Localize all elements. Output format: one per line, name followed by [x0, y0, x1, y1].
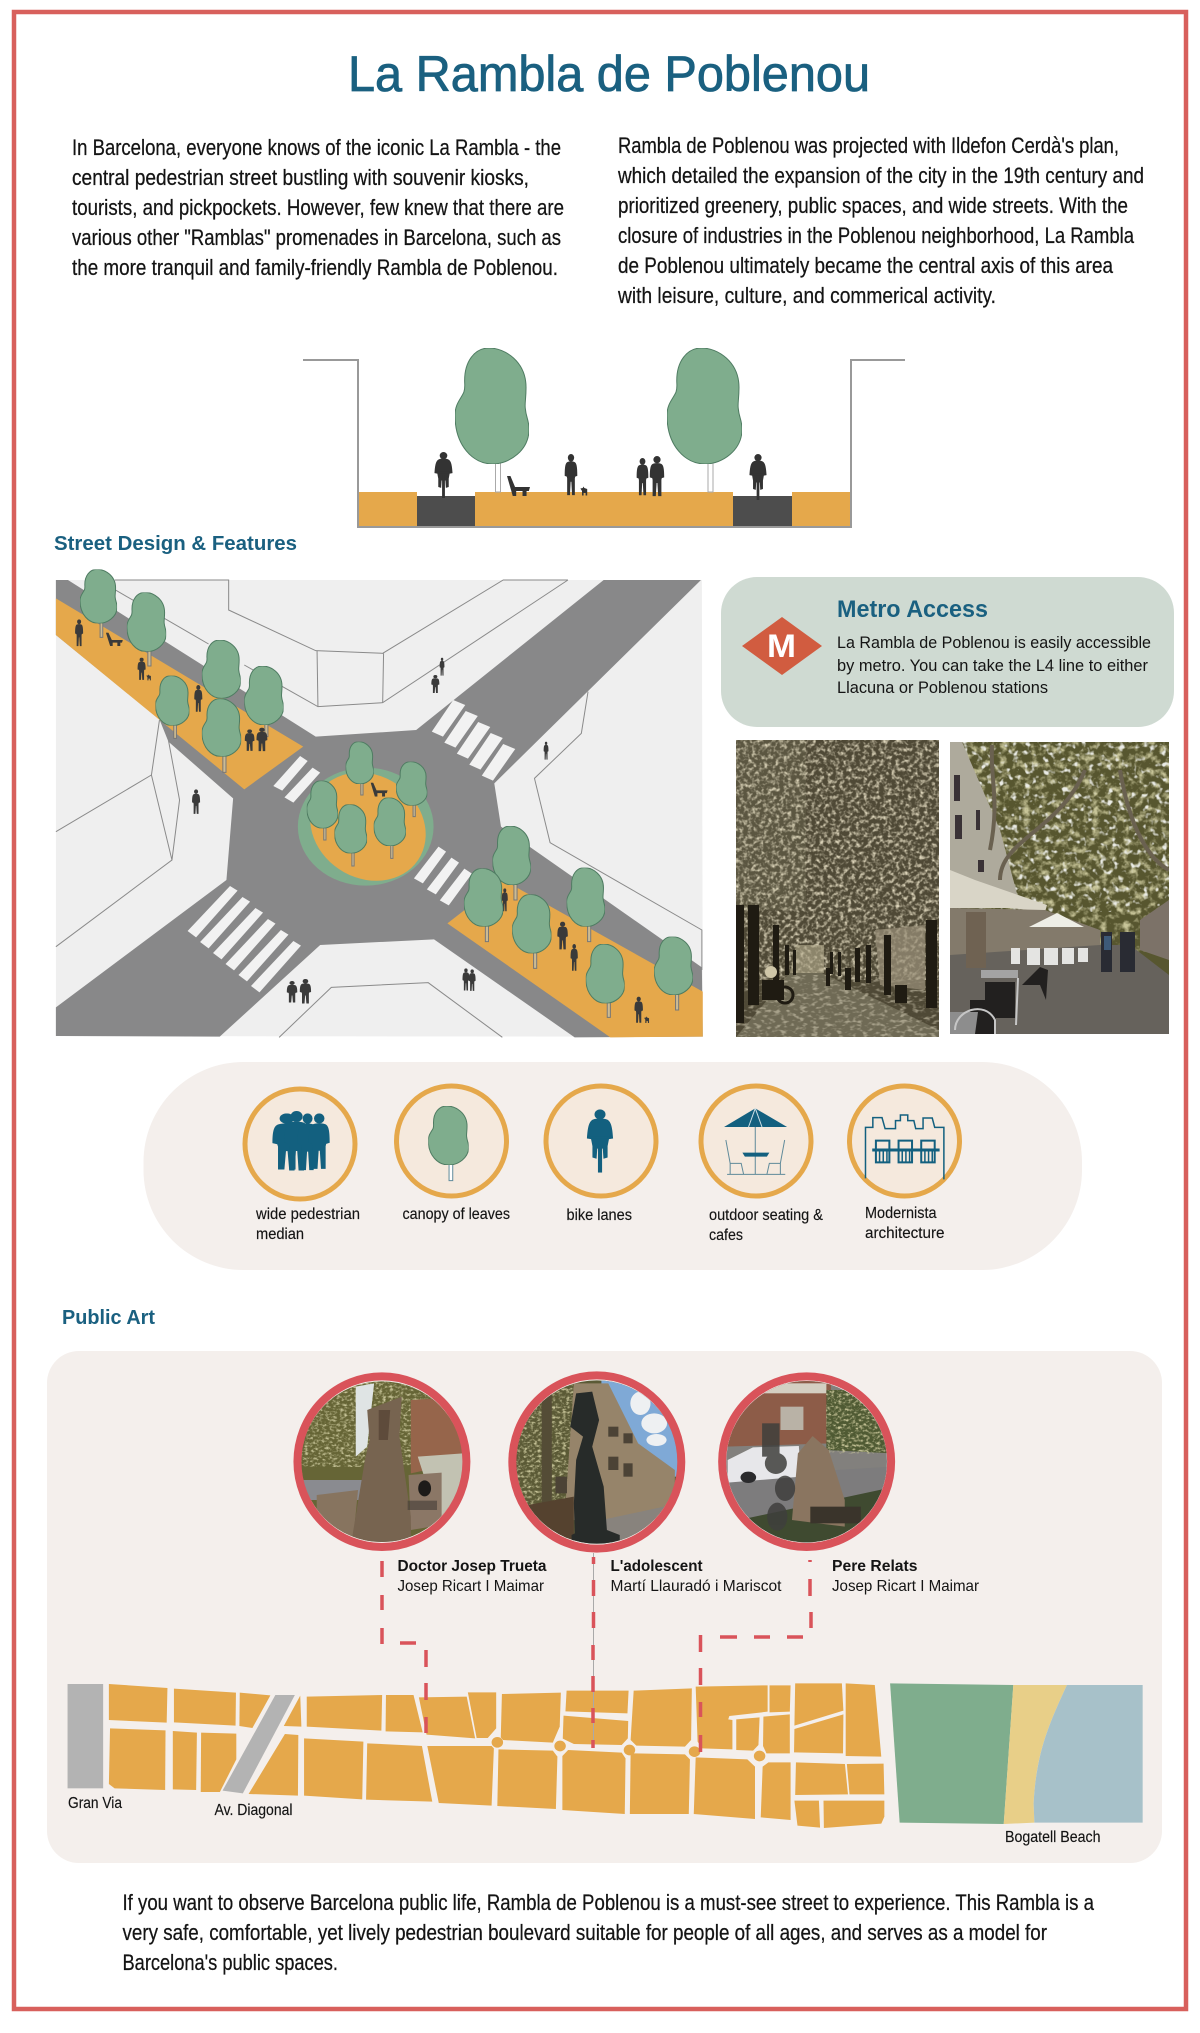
- intro text right: Rambla de Poblenou was projected with Ildefon Cerdà's plan,: [618, 133, 1119, 158]
- feature labels: outdoor seating &: [709, 1207, 823, 1224]
- tree right: [667, 348, 742, 464]
- metro text: Llacuna or Poblenou stations: [837, 678, 1048, 697]
- intro text left: [72, 135, 564, 280]
- title: La Rambla de Poblenou: [348, 46, 870, 102]
- artwork photos: [294, 1373, 895, 1553]
- panel: metro access: [721, 577, 1174, 727]
- label: L'adolescent: Martí Llauradó i Mariscot: [610, 1578, 782, 1595]
- feature labels: canopy of leaves: [402, 1206, 510, 1223]
- feature labels: [255, 1205, 945, 1244]
- label: Pere Relats: Josep Ricart I Maimar: [832, 1578, 980, 1595]
- feature circles: [245, 1086, 960, 1199]
- label: L'adolescent: [610, 1558, 782, 1595]
- photo: Pere Relats sculpture: [718, 1373, 895, 1550]
- dashed leader lines: [382, 1553, 811, 1752]
- feature labels: median: [256, 1226, 304, 1243]
- icon: metro diamond: [742, 617, 822, 675]
- orange median southeast: [447, 880, 703, 1037]
- intro text left: central pedestrian street bustling with souvenir kiosks,: [72, 165, 529, 190]
- icon: pedestrians: [272, 1111, 330, 1170]
- intro text right: [617, 133, 1144, 308]
- map labels: [68, 1795, 1100, 1846]
- intro text right: with leisure, culture, and commerical activity.: [617, 283, 996, 308]
- photo: sepia tree-lined promenade: [736, 740, 939, 1037]
- feature labels: Modernista: [865, 1205, 937, 1222]
- metro text: La Rambla de Poblenou is easily accessible: [837, 633, 1151, 652]
- feature labels: bike lanes: [566, 1207, 632, 1224]
- tree left: [455, 348, 529, 464]
- panel: public art: [47, 1351, 1162, 1863]
- intro text left: In Barcelona, everyone knows of the iconic La Rambla - the: [72, 135, 561, 160]
- roads: [56, 580, 703, 1037]
- icon: modernista facade: [865, 1115, 944, 1179]
- intro text left: tourists, and pickpockets. However, few knew that there are: [72, 195, 564, 220]
- feature labels: architecture: [865, 1225, 945, 1242]
- map labels: Av. Diagonal: [214, 1802, 292, 1819]
- photo: street with cafe terrace: [950, 742, 1169, 1034]
- label: Doctor Josep Trueta: Doctor Josep Trueta: [398, 1558, 547, 1575]
- feature labels: wide pedestrian: [255, 1206, 360, 1223]
- label: Doctor Josep Trueta: [398, 1558, 547, 1595]
- photo: L'adolescent statue: [507, 1373, 686, 1553]
- label: L'adolescent: L'adolescent: [610, 1558, 703, 1575]
- plan trees: [80, 569, 693, 1003]
- icon: tree: [428, 1106, 469, 1181]
- street plan map: [56, 569, 703, 1037]
- central roundabout: [294, 762, 442, 891]
- map labels: Bogatell Beach: [1005, 1829, 1100, 1846]
- closing text: [122, 1890, 1095, 1975]
- intro text right: prioritized greenery, public spaces, and wide streets. With the: [618, 193, 1128, 218]
- icon: cyclist: [587, 1109, 613, 1173]
- building outlines: [56, 580, 702, 1037]
- people and benches: [75, 619, 649, 1023]
- park: [890, 1683, 1013, 1824]
- heading: public art: Public Art: [62, 1307, 155, 1329]
- intro text right: de Poblenou ultimately became the central axis of this area: [618, 253, 1114, 278]
- closing text: very safe, comfortable, yet lively pedestrian boulevard suitable for people of all ages, and serves as a model for: [122, 1920, 1047, 1945]
- metro text: by metro. You can take the L4 line to either: [837, 656, 1148, 675]
- closing text: Barcelona's public spaces.: [122, 1950, 338, 1975]
- heading: street design: Street Design & Features: [54, 533, 297, 555]
- street cross-section diagram: [303, 348, 905, 527]
- beach sand: [1004, 1685, 1067, 1824]
- feature labels: cafes: [709, 1227, 743, 1244]
- artwork labels: [398, 1558, 980, 1595]
- intro text left: various other "Ramblas" promenades in Barcelona, such as: [72, 225, 561, 250]
- photo: Doctor Josep Trueta monument: [294, 1373, 473, 1550]
- intro text left: the more tranquil and family-friendly Rambla de Poblenou.: [72, 255, 558, 280]
- crosswalks: [188, 700, 515, 992]
- metro heading: Metro Access: [837, 596, 988, 623]
- map blocks east: [624, 1683, 1143, 1828]
- panel: features: [144, 1062, 1082, 1270]
- label: Pere Relats: Pere Relats: [832, 1558, 918, 1575]
- tree trunks: [100, 620, 679, 1017]
- map labels: Gran Via: [68, 1795, 122, 1812]
- label: Doctor Josep Trueta: Josep Ricart I Maimar: [398, 1578, 545, 1595]
- sea: [1034, 1685, 1143, 1823]
- label: Pere Relats: [832, 1558, 980, 1595]
- icon: cafe table and umbrella: [724, 1108, 787, 1174]
- icon: metro diamond: M: [767, 628, 796, 664]
- icons: [272, 1106, 944, 1181]
- metro text: [837, 633, 1151, 697]
- map blocks west: [68, 1684, 629, 1814]
- orange median northwest: [56, 598, 303, 789]
- map of the rambla: [68, 1683, 1143, 1846]
